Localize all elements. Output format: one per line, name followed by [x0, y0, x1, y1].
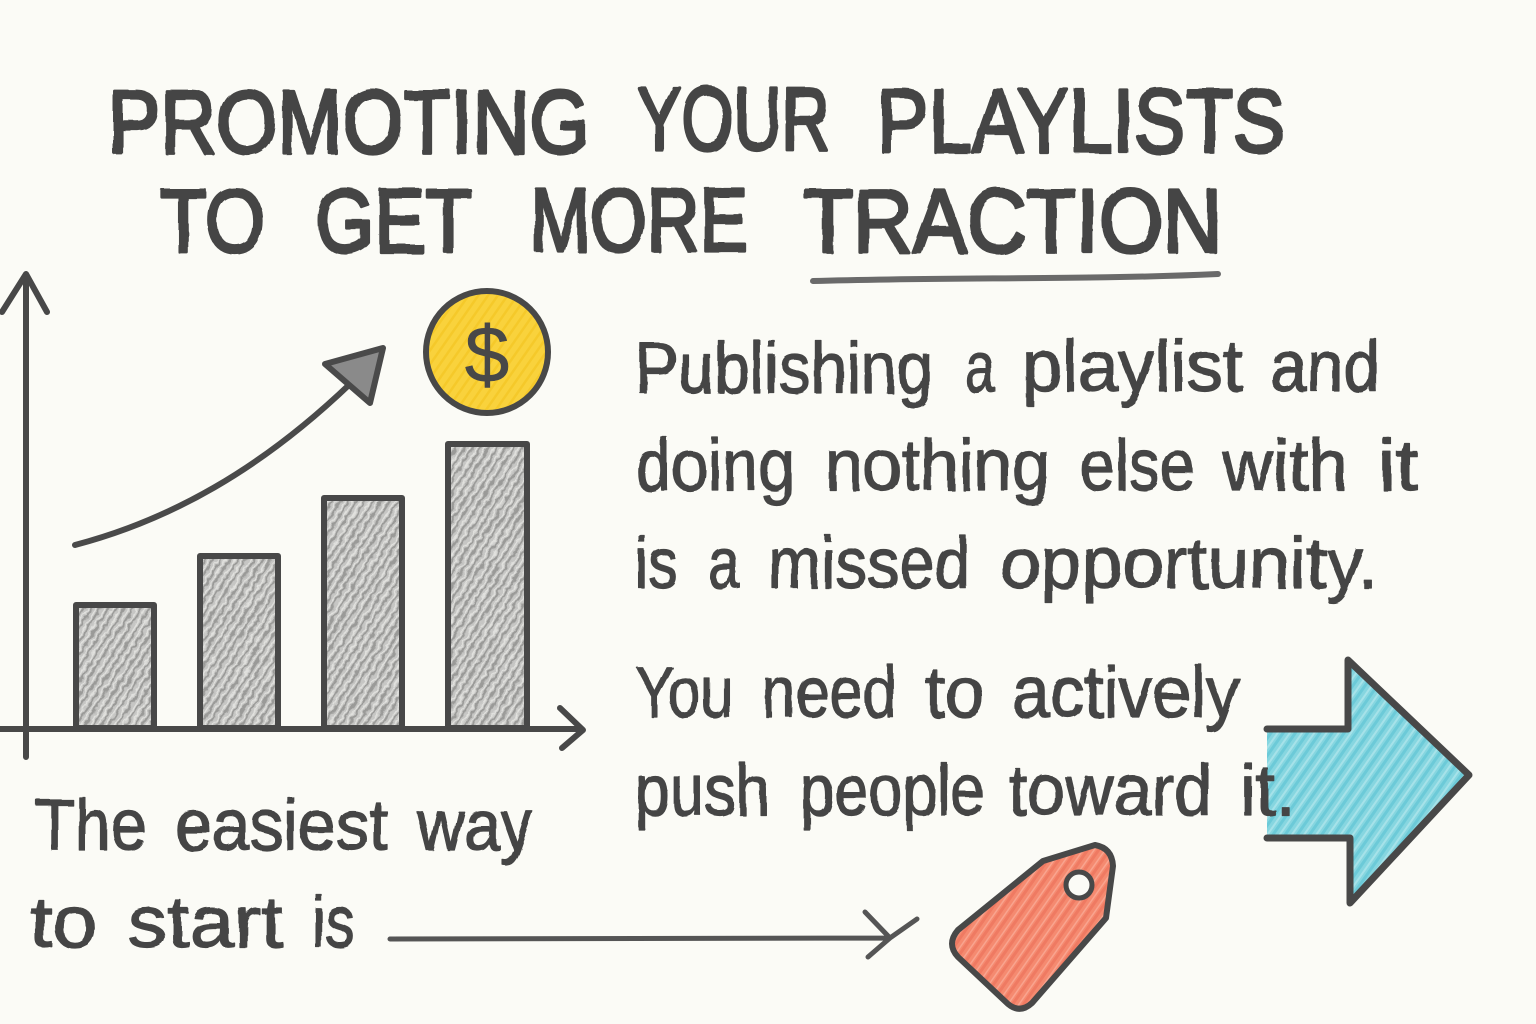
icon: price tag [952, 845, 1113, 1009]
text block: actively push: You [635, 653, 733, 733]
text block: actively push: it. [1240, 751, 1295, 831]
text block: publishing a playlist [635, 327, 1418, 604]
text block: easiest way to start: easiest [175, 786, 388, 866]
text block: publishing a playlist: Publishing [635, 329, 933, 409]
bar chart [0, 274, 583, 757]
title: TO [160, 172, 265, 272]
text block: publishing a playlist: is [635, 524, 678, 604]
text block: actively push [635, 653, 1295, 831]
y axis [2, 274, 47, 757]
text block: publishing a playlist: nothing [825, 426, 1050, 506]
text block: easiest way to start: is [312, 883, 355, 963]
x axis [0, 708, 583, 748]
title underline [813, 274, 1218, 281]
text block: easiest way to start: start [127, 883, 283, 963]
icon: dollar coin [426, 291, 548, 413]
text block: publishing a playlist: and [1270, 327, 1380, 407]
icon: blue arrow [1267, 660, 1469, 903]
icon: dollar coin: $ [465, 310, 509, 399]
title [108, 70, 1285, 272]
text block: publishing a playlist: with [1221, 426, 1348, 506]
text block: actively push: people [800, 751, 985, 831]
title: PLAYLISTS [877, 72, 1285, 172]
bar fills [76, 444, 527, 728]
text block: publishing a playlist: missed [768, 524, 970, 604]
title: MORE [530, 171, 748, 271]
text block: publishing a playlist: opportunity. [1000, 524, 1378, 604]
text block: publishing a playlist: it [1378, 426, 1418, 506]
text block: easiest way to start: to [30, 883, 97, 963]
icon: rising trend arrow [75, 348, 383, 545]
text block: actively push: push [635, 751, 770, 831]
bar outlines [76, 444, 527, 728]
text block: publishing a playlist: doing [635, 426, 795, 506]
text block: actively push: toward [1008, 751, 1212, 831]
title: GET [315, 172, 472, 272]
title: PROMOTING [108, 73, 590, 173]
text block: easiest way to start: The [35, 786, 147, 866]
text block: publishing a playlist: playlist [1022, 327, 1243, 407]
title: TRACTION [803, 172, 1222, 272]
text block: actively push: actively [1012, 653, 1240, 733]
text block: actively push: to [925, 653, 985, 733]
text block: publishing a playlist: a [965, 328, 996, 408]
title: YOUR [637, 70, 830, 170]
arrow to price tag [390, 912, 917, 957]
text block: easiest way to start: way [416, 786, 533, 866]
text block: easiest way to start [30, 786, 533, 963]
text block: publishing a playlist: else [1080, 426, 1195, 506]
text block: publishing a playlist: a [708, 524, 741, 604]
text block: actively push: need [762, 653, 897, 733]
